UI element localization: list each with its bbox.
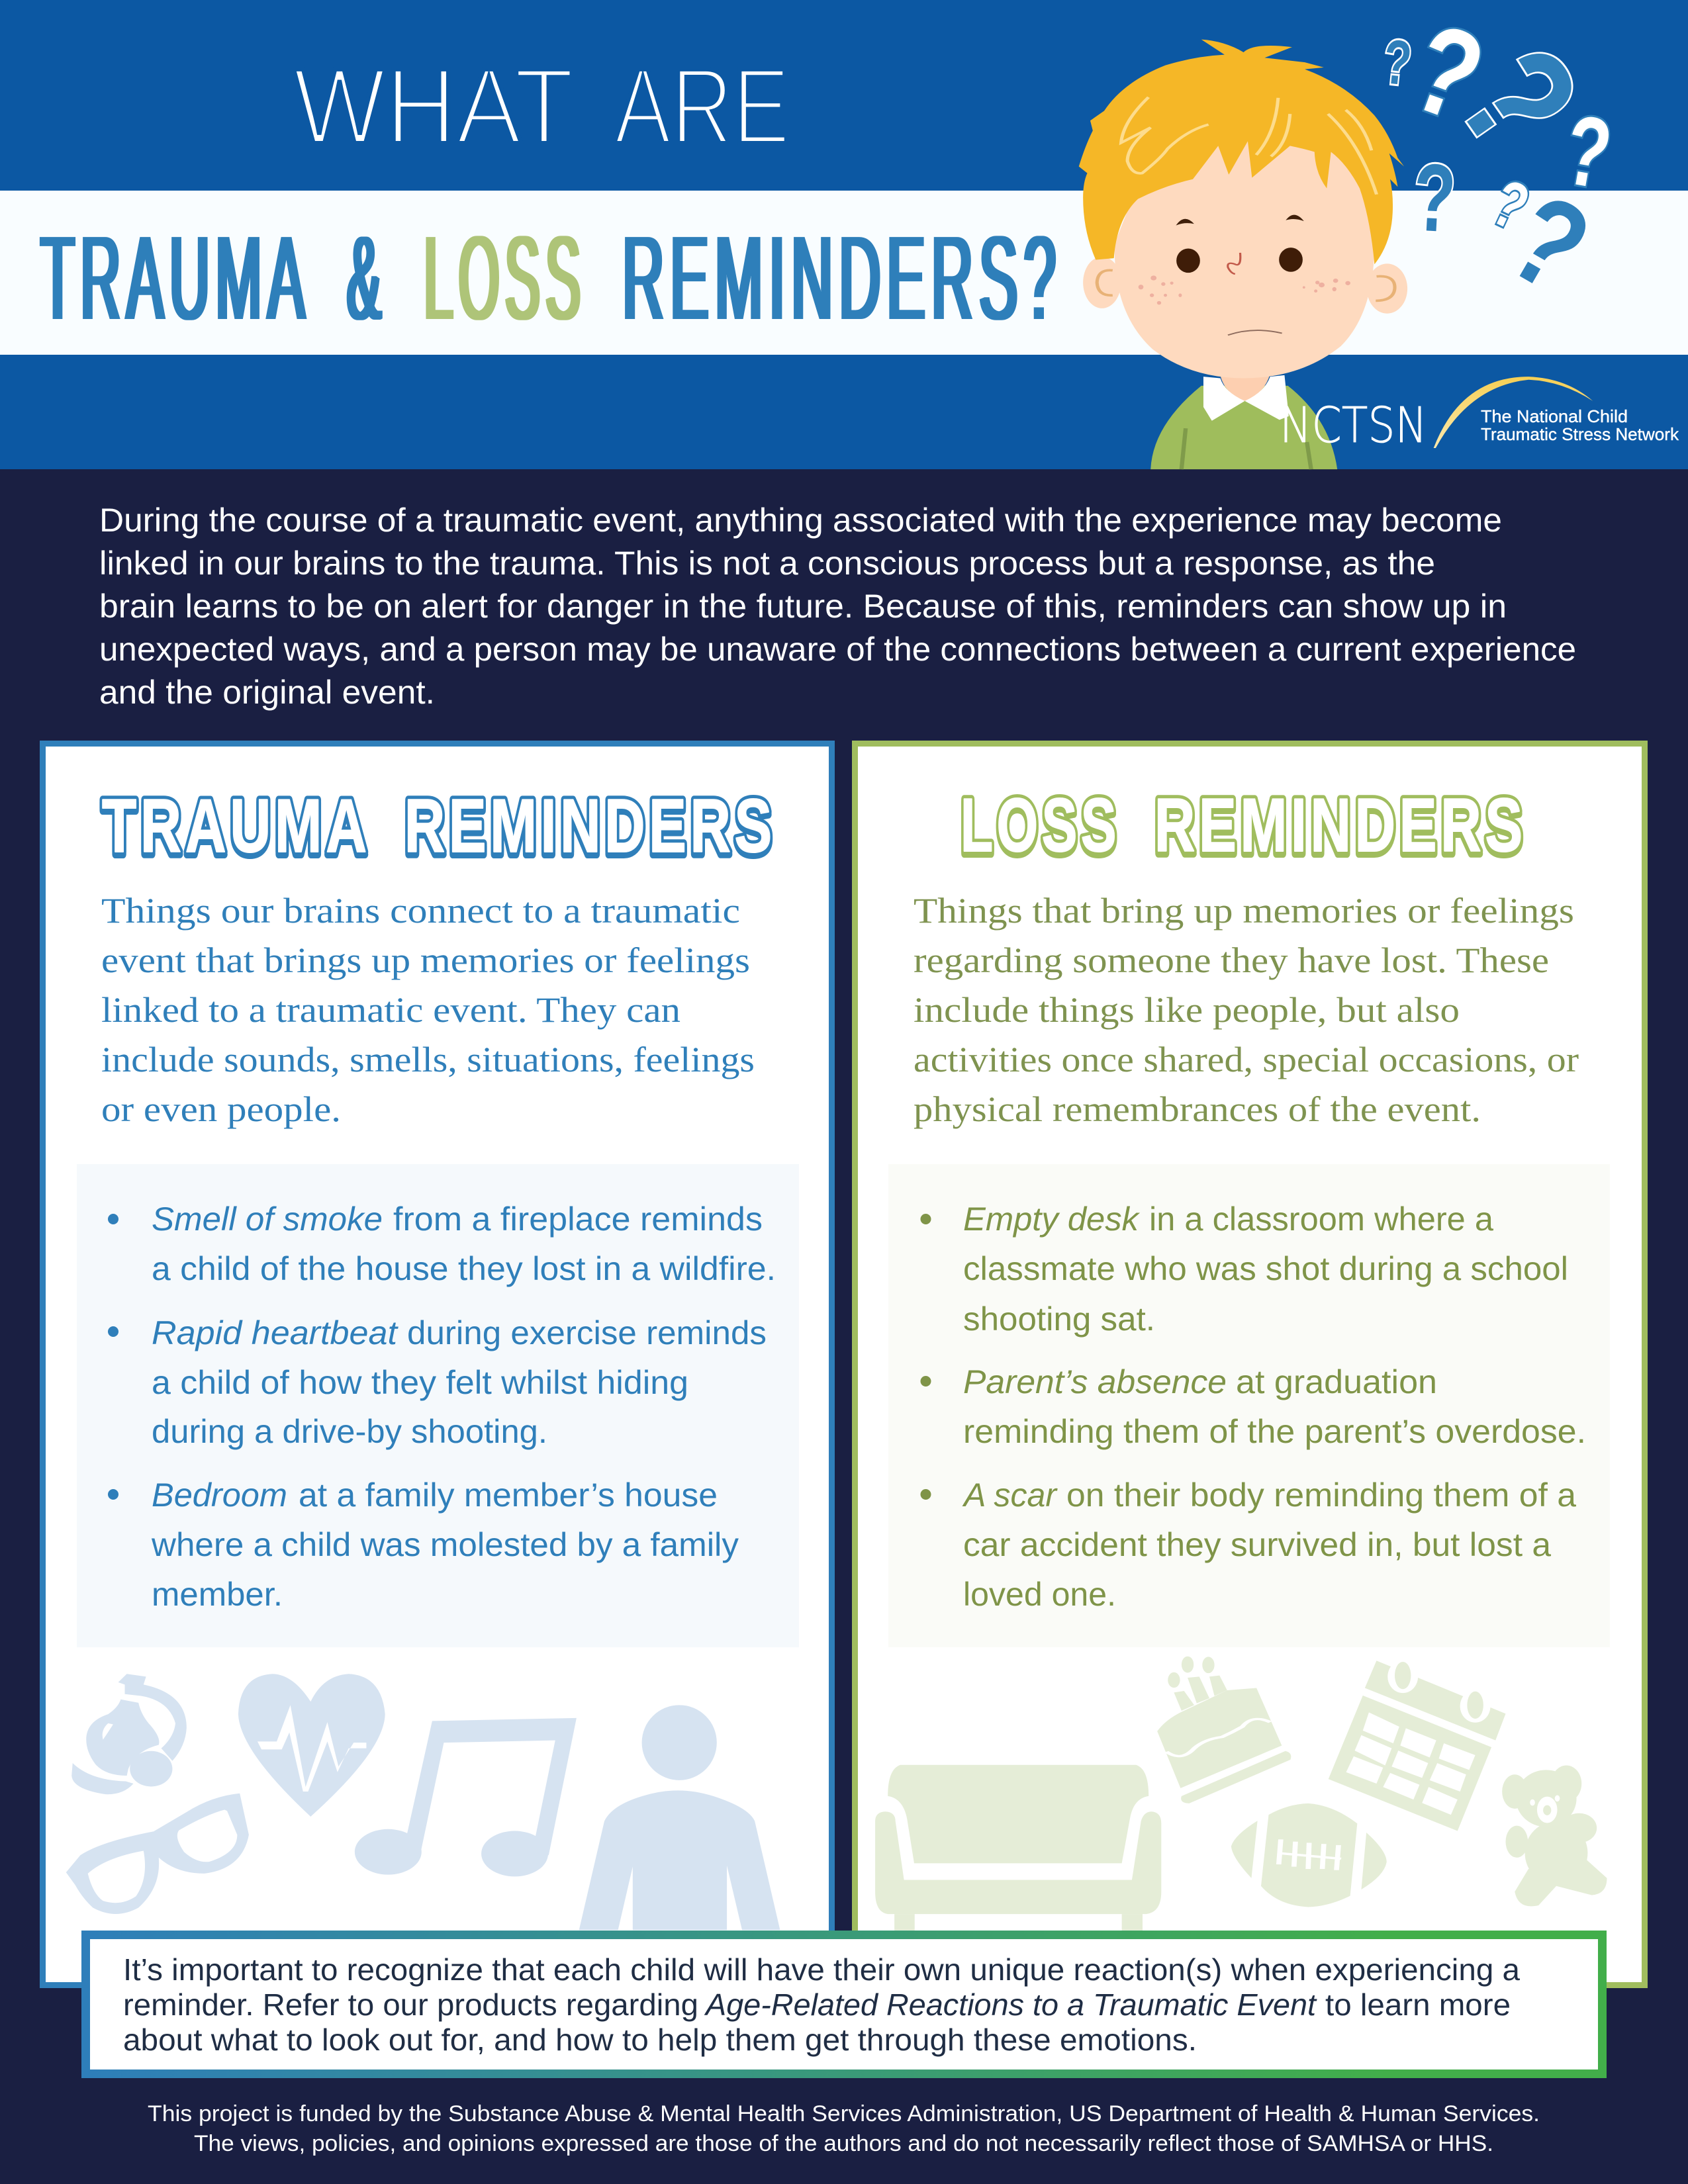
callout text: to learn more: [1325, 1987, 1511, 2022]
examples list: trauma: during a drive-by shooting.: [152, 1413, 547, 1450]
icon: question marks: ?: [1380, 26, 1415, 99]
heading: trauma reminders: REMINDERS: [404, 784, 776, 868]
examples list: loss: loved one.: [963, 1576, 1116, 1613]
examples list: loss: classmate who was shot during a school: [963, 1250, 1568, 1287]
logo: NCTSN: [1280, 377, 1679, 454]
examples list: trauma: during exercise reminds: [407, 1314, 767, 1351]
description: loss reminders: [914, 891, 1579, 1129]
title: what are: WHAT: [293, 45, 574, 167]
icon: perfume bottle: [71, 1674, 187, 1794]
examples list: trauma: a child of the house they lost in a wildfire.: [152, 1250, 776, 1287]
heading: loss reminders: LOSS: [961, 784, 1120, 868]
icon: football: [1231, 1803, 1387, 1907]
footer disclaimer: The views, policies, and opinions expressed are those of the authors and do not necessarily reflect those of SAMHSA or HHS.: [194, 2131, 1493, 2156]
title: what are: ARE: [614, 45, 790, 167]
icon: question marks: ?: [1411, 144, 1458, 253]
icon: question marks: ?: [1481, 165, 1540, 245]
heading: loss reminders: LOSS: [961, 786, 1120, 870]
icons: trauma reminders: [66, 1674, 780, 1930]
heading: loss reminders: REMINDERS: [1154, 784, 1526, 868]
icon: music note: [355, 1718, 577, 1876]
icon: question marks: [1380, 0, 1619, 320]
heading: loss reminders: LOSS: [961, 784, 1120, 868]
intro paragraph: [99, 502, 1576, 711]
title: trauma and loss reminders: LOSS: [424, 212, 586, 345]
intro paragraph: During the course of a traumatic event, anything associated with the experience may become: [99, 502, 1502, 539]
footer disclaimer: This project is funded by the Substance Abuse & Mental Health Services Administration, US Department of Health & Human Services.: [148, 2101, 1540, 2126]
description: trauma reminders: Things our brains connect to a traumatic: [101, 891, 740, 931]
illustration: boy: [1079, 40, 1407, 469]
heading: loss reminders: REMINDERS: [1154, 786, 1526, 870]
callout text: Age-Related Reactions to a Traumatic Event: [704, 1987, 1317, 2022]
examples list: loss: in a classroom where a: [1149, 1201, 1493, 1238]
heading: trauma reminders: TRAUMA: [102, 784, 371, 868]
examples list: trauma: [77, 1164, 799, 1647]
heading: loss reminders: [961, 784, 1526, 870]
callout text: It’s important to recognize that each child will have their own unique reaction(s) when experiencing a: [123, 1952, 1520, 1987]
title: trauma and loss reminders: [41, 212, 1062, 345]
panel: trauma reminders: [42, 744, 831, 1985]
text: REMINDERS?: [622, 212, 1062, 345]
header banner: [0, 0, 1688, 469]
description: loss reminders: include things like people, but also: [914, 990, 1460, 1030]
examples list: loss: Empty desk: [963, 1201, 1141, 1238]
examples list: trauma: a child of how they felt whilst hiding: [152, 1364, 688, 1401]
title: trauma and loss reminders: &: [347, 212, 381, 345]
examples list: trauma: at a family member’s house: [299, 1477, 718, 1514]
footer disclaimer: [148, 2101, 1540, 2156]
heading: loss reminders: REMINDERS: [1154, 784, 1526, 868]
examples list: loss: car accident they survived in, but lost a: [963, 1526, 1551, 1563]
icon: armchair: [875, 1765, 1161, 1931]
examples list: trauma: from a fireplace reminds: [393, 1201, 763, 1238]
icons: loss reminders: [875, 1657, 1607, 1931]
description: loss reminders: physical remembrances of the event.: [914, 1089, 1481, 1129]
examples list: loss: on their body reminding them of a: [1066, 1477, 1576, 1514]
icon: question marks: ?: [1395, 0, 1501, 149]
callout text: reminder. Refer to our products regarding: [123, 1987, 698, 2022]
intro paragraph: unexpected ways, and a person may be unaware of the connections between a current experience: [99, 631, 1576, 668]
examples list: loss: reminding them of the parent’s overdose.: [963, 1413, 1586, 1450]
description: loss reminders: activities once shared, special occasions, or: [914, 1040, 1579, 1079]
description: trauma reminders: [101, 891, 755, 1129]
examples list: loss: shooting sat.: [963, 1300, 1155, 1338]
examples list: trauma: Bedroom: [152, 1477, 287, 1514]
heading: trauma reminders: TRAUMA: [102, 784, 371, 868]
callout: [81, 1931, 1607, 2078]
examples list: trauma: Rapid heartbeat: [152, 1314, 399, 1351]
examples list: trauma: Smell of smoke: [152, 1201, 383, 1238]
description: trauma reminders: event that brings up memories or feelings: [101, 940, 750, 980]
examples list: trauma: member.: [152, 1576, 283, 1613]
heading: trauma reminders: [102, 784, 776, 871]
examples list: loss: [888, 1164, 1610, 1647]
logo: NCTSN: NCTSN: [1280, 397, 1427, 454]
intro paragraph: linked in our brains to the trauma. This is not a conscious process but a response, as the: [99, 545, 1435, 582]
heading: trauma reminders: REMINDERS: [404, 787, 776, 871]
icon: person: [579, 1705, 780, 1930]
icon: birthday cake: [1157, 1657, 1291, 1803]
logo: NCTSN: The National Child: [1481, 406, 1628, 426]
icon: question marks: ?: [1557, 93, 1619, 210]
icon: glasses: [66, 1794, 249, 1914]
callout text: [123, 1952, 1520, 2057]
heading: trauma reminders: TRAUMA: [102, 787, 371, 871]
icon: calendar: [1329, 1661, 1505, 1831]
intro paragraph: brain learns to be on alert for danger in the future. Because of this, reminders can show up in: [99, 588, 1507, 625]
icon: question marks: ?: [1423, 17, 1613, 183]
description: loss reminders: regarding someone they have lost. These: [914, 940, 1549, 980]
examples list: loss: A scar: [962, 1477, 1058, 1514]
title: trauma and loss reminders: TRAUMA: [41, 212, 311, 345]
icon: heart with pulse: [238, 1674, 385, 1817]
heading: trauma reminders: REMINDERS: [404, 784, 776, 868]
examples list: trauma: where a child was molested by a family: [151, 1526, 739, 1563]
description: trauma reminders: or even people.: [101, 1089, 341, 1129]
icon: teddy bear: [1502, 1765, 1607, 1906]
panel: loss reminders: [855, 744, 1644, 1985]
examples list: loss: at graduation: [1236, 1363, 1437, 1400]
description: trauma reminders: include sounds, smells, situations, feelings: [101, 1040, 755, 1079]
description: loss reminders: Things that bring up memories or feelings: [914, 891, 1574, 931]
logo: NCTSN: Traumatic Stress Network: [1481, 424, 1679, 444]
description: trauma reminders: linked to a traumatic event. They can: [101, 990, 680, 1030]
icon: question marks: ?: [1487, 167, 1612, 320]
title: what are: [293, 45, 790, 167]
callout text: about what to look out for, and how to help them get through these emotions.: [123, 2023, 1197, 2057]
intro paragraph: and the original event.: [99, 674, 435, 711]
examples list: loss: Parent’s absence: [963, 1363, 1227, 1400]
